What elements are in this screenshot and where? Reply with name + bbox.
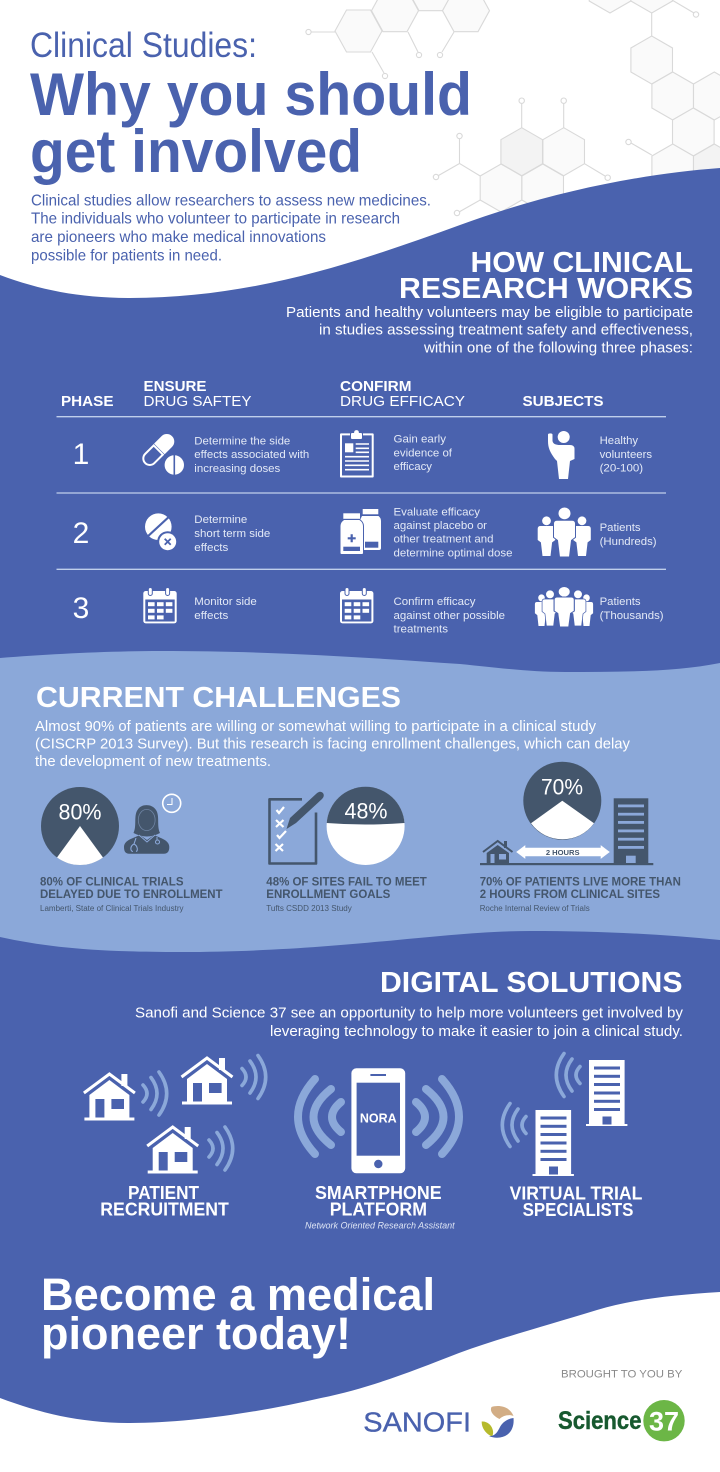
phase numbers [73, 438, 89, 625]
icon: smartphone with signal [298, 1068, 459, 1173]
text: phase 1 safety: Determine the side [194, 435, 290, 447]
pie chart: 48%: 48% [344, 798, 388, 824]
intro paragraph [31, 192, 431, 264]
text: phase 1 subjects: (20-100) [600, 463, 643, 475]
table header: PHASE [61, 393, 114, 410]
icon: connected buildings [502, 1054, 627, 1176]
text: phase 1 safety [194, 435, 309, 475]
text: phase 2 subjects [600, 522, 657, 548]
text: phase 3 safety [194, 596, 257, 622]
call to action: pioneer today! [41, 1308, 351, 1359]
heading: digital solutions: DIGITAL SOLUTIONS [380, 967, 682, 999]
text: phase 1 safety: increasing doses [194, 463, 281, 475]
icon: calendar [143, 588, 177, 623]
solution: virtual trial specialists [502, 1054, 642, 1220]
icon: calendar [340, 588, 373, 623]
logo: Science 37: Science [558, 1407, 642, 1435]
text: phase 1 efficacy: efficacy [394, 461, 432, 473]
table header: CONFIRM [340, 378, 412, 395]
light blue challenges band [0, 651, 720, 952]
logo: Science 37: 37 [649, 1406, 679, 1436]
logo: Science 37 [558, 1400, 685, 1441]
pie chart: 80%: 80% [58, 800, 102, 824]
intro paragraph: The individuals who volunteer to participate in research [31, 210, 400, 228]
digital solutions paragraph: leveraging technology to make it easier to join a clinical study. [270, 1024, 683, 1040]
intro paragraph: possible for patients in need. [31, 248, 222, 264]
text: phase 3 efficacy: treatments [394, 624, 448, 636]
text: phase 2 efficacy: against placebo or [394, 520, 487, 532]
stat label: ENROLLMENT GOALS [266, 888, 391, 901]
stat label: 2 HOURS FROM CLINICAL SITES [480, 888, 660, 901]
icon: pill and tablet [140, 431, 184, 476]
title: get involved [30, 118, 362, 185]
stat: 80% of trials delayed [40, 787, 222, 913]
title: Why you should [30, 61, 472, 128]
text: phase 3 subjects: (Thousands) [600, 610, 664, 622]
text: phase 3 safety: effects [194, 610, 229, 622]
text: phase 3 efficacy [394, 596, 505, 636]
brought to you by: BROUGHT TO YOU BY [561, 1369, 683, 1381]
how it works intro text: within one of the following three phases: [423, 340, 693, 356]
label: SPECIALISTS [523, 1200, 633, 1220]
text: phase 2 safety: Determine [194, 514, 247, 526]
stat label: 70% OF PATIENTS LIVE MORE THAN [480, 876, 681, 888]
challenges paragraph: Almost 90% of patients are willing or somewhat willing to participate in a clinical study [35, 719, 597, 735]
phases table [56, 378, 666, 636]
challenges paragraph: the development of new treatments. [35, 754, 271, 770]
digital solutions paragraph [135, 1006, 684, 1040]
pie chart: 48% [327, 787, 405, 865]
text: phase 3 subjects [600, 596, 664, 622]
solution: smartphone platform [298, 1068, 459, 1231]
caption: Network Oriented Research Assistant [305, 1221, 455, 1231]
table header: DRUG EFFICACY [340, 393, 465, 410]
text: phase 2 subjects: (Hundreds) [600, 536, 657, 548]
icon: house [483, 841, 512, 864]
icon: clipboard report [341, 430, 373, 476]
arrow: 2 hours [517, 846, 609, 858]
text: phase 1 subjects: Healthy [600, 435, 639, 447]
text: phase 1 safety: effects associated with [194, 449, 309, 461]
icon: checklist and pen [270, 792, 324, 864]
text: phase 1 efficacy [394, 434, 453, 473]
how it works intro text: Patients and healthy volunteers may be eligible to participate [286, 304, 693, 321]
text: phase 3 efficacy: against other possible [394, 610, 505, 622]
icon: doctor [124, 805, 169, 854]
stat label: 48% OF SITES FAIL TO MEET [266, 876, 427, 888]
text: phase 1 subjects [600, 435, 653, 475]
digital solutions paragraph: Sanofi and Science 37 see an opportunity to help more volunteers get involved by [135, 1006, 684, 1022]
text: phase 2 safety: short term side [194, 528, 270, 540]
label: PLATFORM [330, 1200, 427, 1220]
heading: how clinical research works [399, 247, 693, 305]
decorative molecule hexagons [306, 0, 720, 216]
icon: split tablet with cross [145, 513, 178, 552]
stat label [266, 876, 427, 901]
text: phase 2 efficacy: Evaluate efficacy [394, 506, 480, 518]
pie chart: 70% [523, 762, 601, 840]
text: phase 3 safety: Monitor side [194, 596, 257, 608]
phase numbers: 1 [73, 438, 89, 471]
icon: connected houses [84, 1056, 266, 1174]
pie chart: 70%: 70% [541, 774, 583, 800]
text: phase 2 safety: effects [194, 542, 229, 554]
stat: 70% live far away [480, 762, 681, 913]
text: phase 1 subjects: volunteers [600, 449, 653, 461]
phase numbers: 3 [73, 592, 89, 625]
table header [61, 378, 604, 410]
text: phase 3 efficacy: Confirm efficacy [394, 596, 476, 608]
icon: raised hand volunteer [548, 431, 574, 479]
intro paragraph: Clinical studies allow researchers to assess new medicines. [31, 192, 431, 210]
stat label: DELAYED DUE TO ENROLLMENT [40, 888, 222, 901]
stat: 48% of sites fail [266, 787, 427, 913]
challenges paragraph: (CISCRP 2013 Survey). But this research is facing enrollment challenges, which can delay [35, 736, 631, 752]
icon: medicine bottles [340, 509, 381, 554]
pie chart: 80% [41, 787, 119, 865]
solution: patient recruitment [84, 1056, 266, 1220]
label [510, 1184, 642, 1220]
icon: three patients [538, 508, 591, 557]
heading: how clinical research works: HOW CLINICAL [470, 247, 693, 279]
logo: Sanofi [363, 1406, 514, 1438]
label [315, 1183, 442, 1220]
source: Tufts CSDD 2013 Study [266, 904, 352, 913]
table header: DRUG SAFTEY [144, 393, 252, 410]
label: SMARTPHONE [315, 1183, 442, 1203]
text: phase 2 efficacy: determine optimal dose [394, 548, 512, 560]
label: VIRTUAL TRIAL [510, 1184, 642, 1204]
challenges paragraph [35, 719, 631, 770]
arrow: 2 hours: 2 HOURS [546, 848, 580, 857]
icon: crowd of patients [535, 587, 593, 627]
icon: smartphone with signal: NORA [360, 1112, 397, 1126]
text: phase 2 efficacy [394, 506, 512, 560]
how it works intro text [286, 304, 693, 356]
call to action [41, 1269, 435, 1359]
text: phase 2 subjects: Patients [600, 522, 641, 534]
text: phase 3 subjects: Patients [600, 596, 641, 608]
heading: how clinical research works: RESEARCH WORKS [399, 273, 693, 305]
phase numbers: 2 [73, 517, 89, 550]
stat label [480, 876, 681, 901]
title [30, 26, 472, 185]
text: phase 2 safety [194, 514, 270, 554]
stat label [40, 876, 222, 901]
icon: clock [163, 794, 181, 812]
heading: current challenges: CURRENT CHALLENGES [36, 682, 401, 714]
logo: Sanofi: SANOFI [363, 1406, 471, 1438]
table header: ENSURE [144, 378, 206, 395]
label [100, 1183, 229, 1220]
label: PATIENT [128, 1183, 199, 1203]
how it works intro text: in studies assessing treatment safety and effectiveness, [319, 322, 693, 338]
icon: hospital building [614, 798, 648, 864]
label: RECRUITMENT [100, 1200, 229, 1220]
source: Roche Internal Review of Trials [480, 904, 590, 913]
call to action: Become a medical [41, 1269, 435, 1320]
text: phase 1 efficacy: Gain early [394, 434, 446, 446]
intro paragraph: are pioneers who make medical innovations [31, 229, 326, 246]
title: Clinical Studies: [30, 26, 257, 65]
text: phase 2 efficacy: other treatment and [394, 534, 494, 546]
table header: SUBJECTS [522, 393, 604, 410]
text: phase 1 efficacy: evidence of [394, 448, 453, 460]
stat label: 80% OF CLINICAL TRIALS [40, 876, 184, 888]
source: Lamberti, State of Clinical Trials Industry [40, 904, 184, 913]
